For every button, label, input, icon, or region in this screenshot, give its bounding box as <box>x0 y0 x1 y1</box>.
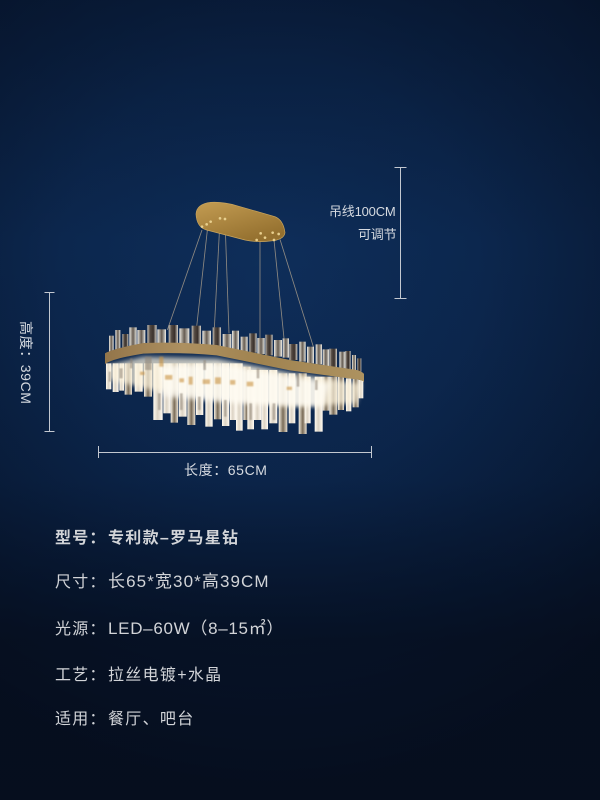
chandelier illustration <box>105 202 364 434</box>
spec: usage: 餐厅、吧台 <box>108 710 195 728</box>
hanging wires <box>167 220 313 347</box>
spec: model: 专利款–罗马星钻 <box>108 529 239 547</box>
spec: craft: 拉丝电镀+水晶 <box>108 666 222 684</box>
dimension: length: 长度：65CM <box>184 462 268 478</box>
dimension: cord length <box>329 168 406 298</box>
lower crystals <box>106 363 363 434</box>
dimension: cord length: 可调节 <box>358 227 397 242</box>
spec: light source: 光源： <box>55 621 107 638</box>
spec: size: 长65*宽30*高39CM <box>108 572 270 591</box>
dimension: height: 高度：39CM <box>18 321 34 405</box>
spec list <box>55 529 284 728</box>
brass ring band <box>105 343 364 382</box>
spec: craft: 工艺： <box>55 667 107 684</box>
spec: usage: 适用： <box>55 711 107 728</box>
upper crystals <box>109 325 361 372</box>
inner light glow <box>108 357 362 420</box>
spec: size: 尺寸： <box>55 574 107 591</box>
dimension: cord length: 吊线100CM <box>329 204 396 219</box>
dimension: height <box>18 292 54 432</box>
dimension: length <box>98 446 372 478</box>
spec: light source: LED–60W（8–15㎡） <box>108 619 284 638</box>
spec: model: 型号： <box>55 530 107 547</box>
ceiling canopy <box>196 202 285 242</box>
